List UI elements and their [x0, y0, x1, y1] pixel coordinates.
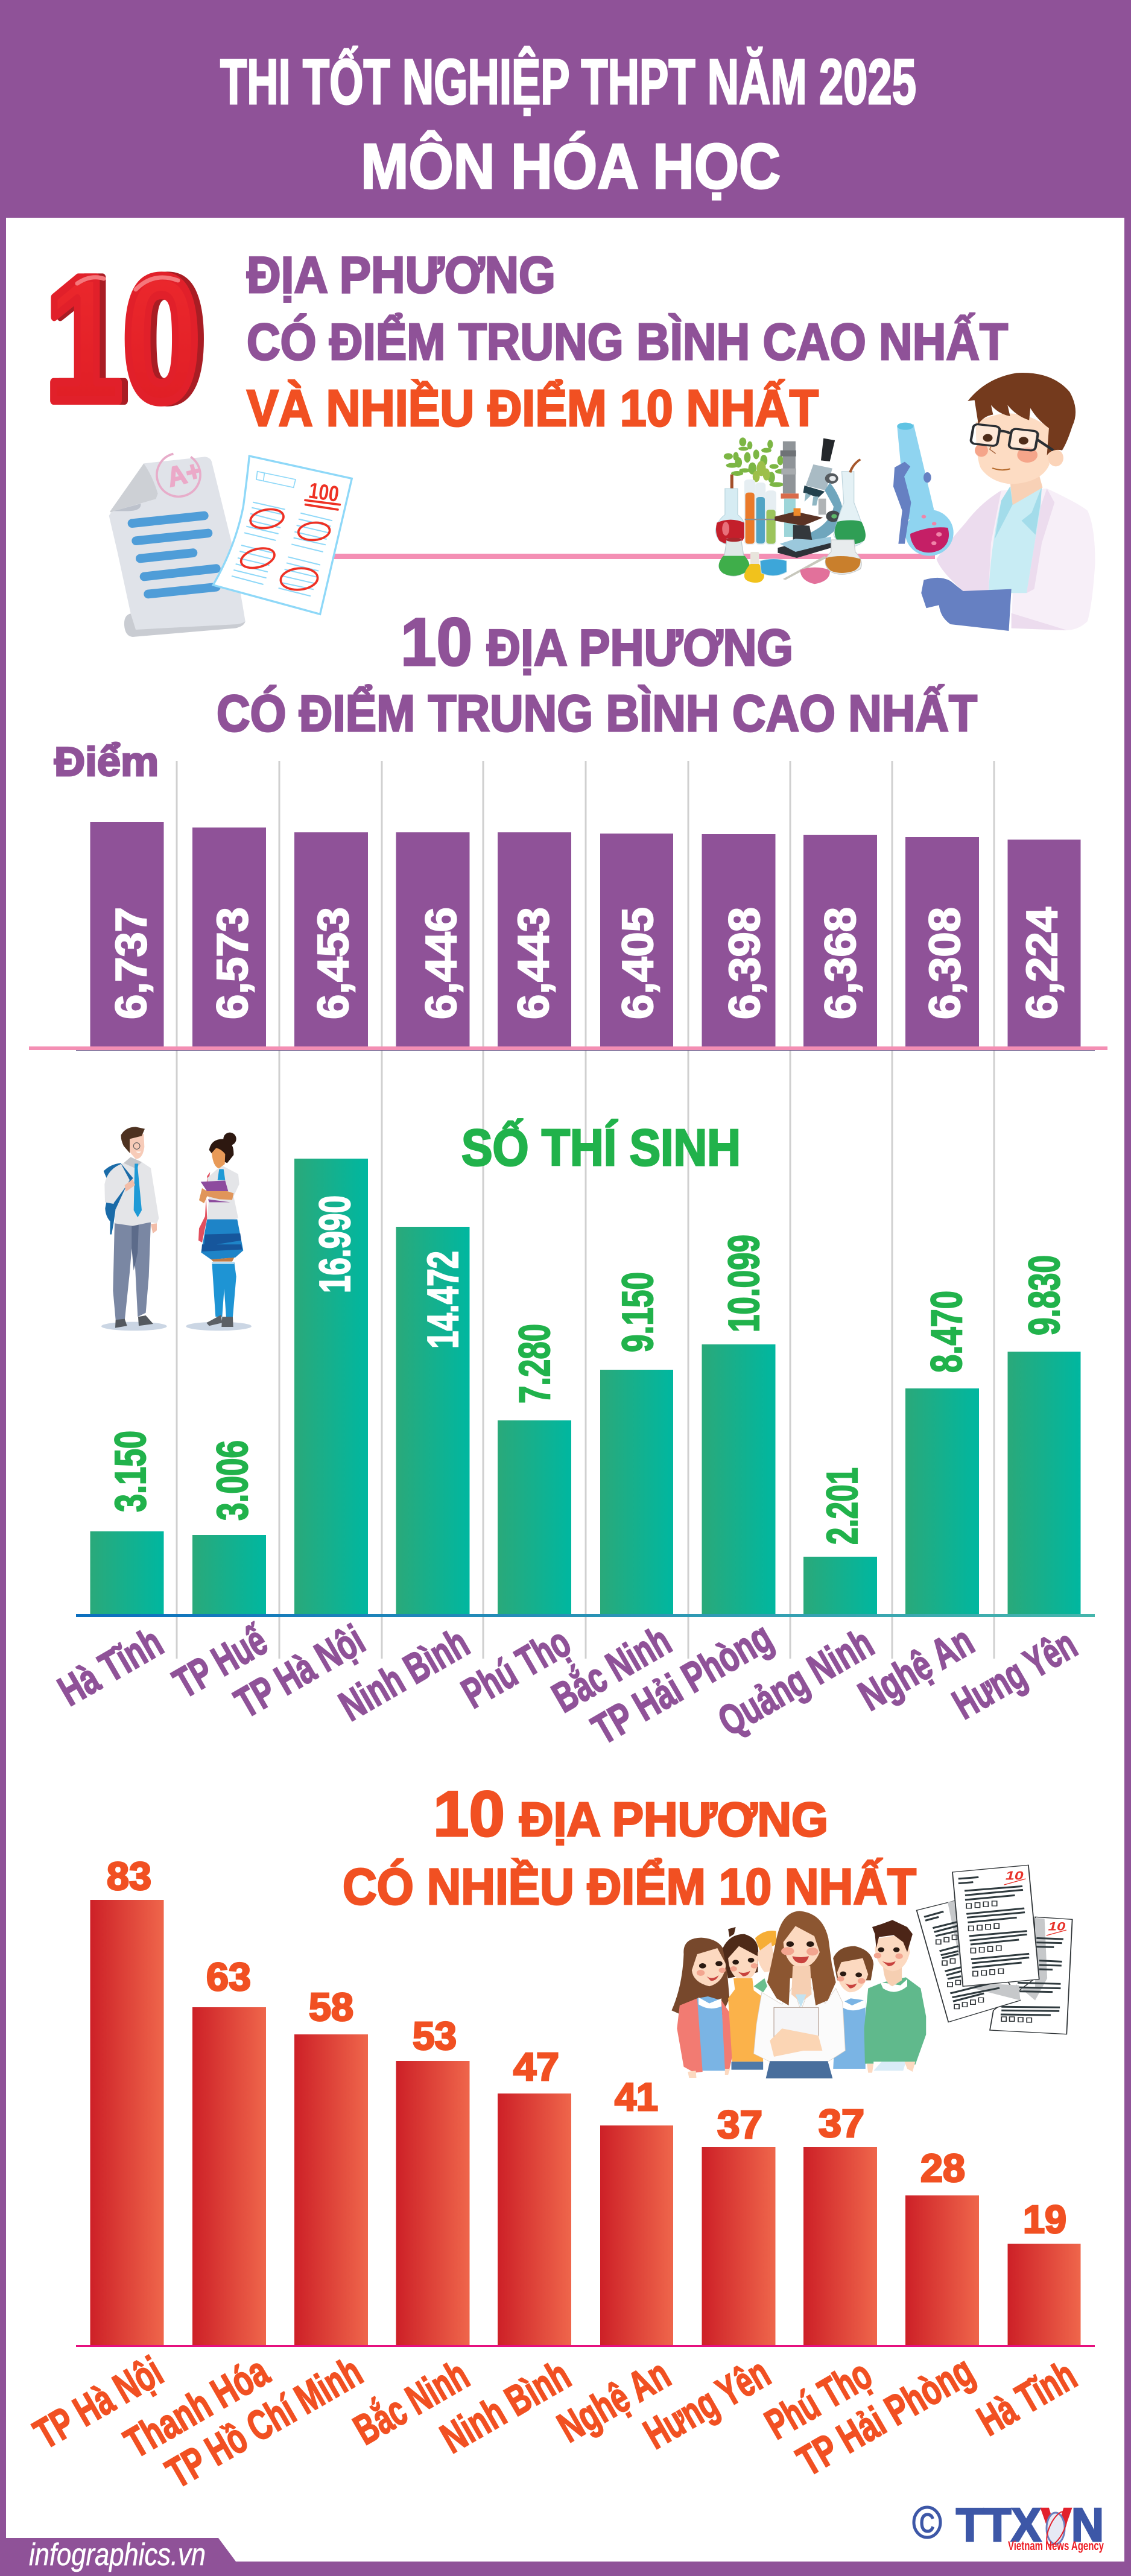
section heading: average score: ĐỊA PHƯƠNG: [487, 619, 793, 677]
subtitle heading: ĐỊA PHƯƠNG: [247, 247, 556, 304]
province labels: orange: Phú Thọ: [758, 2350, 879, 2448]
bar: Phú Thọ 6,443: [498, 832, 571, 1046]
province labels: purple: Nghệ An: [851, 1617, 981, 1720]
logo: TTXVN: TTXVN: [956, 2498, 1104, 2551]
bar chart: number of 10-point scores: [90, 1854, 1081, 2345]
bar: TP Hải Phòng 28: [905, 2146, 979, 2345]
logo: TTXVN: C: [919, 2507, 935, 2539]
blonde student: [754, 1931, 776, 1992]
bar: Ninh Bình 14.472: [396, 1227, 469, 1615]
bar: Hưng Yên 9.830: 9.830: [1021, 1255, 1069, 1335]
heading: number of candidates: SỐ THÍ SINH: [461, 1119, 741, 1177]
bar: TP Hà Nội 16.990: [294, 1159, 368, 1615]
bar: TP Hải Phòng 10.099: [702, 1235, 776, 1615]
bar: Hưng Yên 37: 37: [717, 2103, 762, 2147]
province labels: orange: [27, 2347, 1084, 2497]
bar: Bắc Ninh 53: [396, 2014, 469, 2345]
bar: Nghệ An 8.470: [905, 1291, 979, 1615]
province labels: purple: TP Hà Nội: [227, 1616, 372, 1727]
bar: TP Hải Phòng 6,398: 6,398: [721, 907, 769, 1019]
bar chart: average score: [90, 822, 1081, 1046]
province labels: purple: TP Huế: [165, 1616, 275, 1707]
section heading: average score: 10: [401, 604, 472, 680]
bar: Hưng Yên 6,224: [1007, 840, 1081, 1046]
bar: Phú Thọ 7.280: [498, 1324, 571, 1615]
bar: Nghệ An 8.470: 8.470: [923, 1291, 971, 1373]
bar: Thanh Hóa 63: [192, 1955, 266, 2345]
section heading: most 10-point scores: ĐỊA PHƯƠNG: [519, 1793, 828, 1846]
section heading: average score: CÓ ĐIỂM TRUNG BÌNH CAO NHẤT: [217, 685, 977, 742]
bar: Ninh Bình 6,446: [396, 832, 469, 1046]
province labels: orange: Hà Tĩnh: [970, 2351, 1084, 2445]
bar: TP Hồ Chí Minh 58: 58: [309, 1985, 353, 2029]
bar: TP Hải Phòng 6,398: [702, 834, 776, 1046]
icon: two students: [101, 1127, 252, 1331]
bar: TP Hà Nội 16.990: 16.990: [311, 1195, 360, 1293]
male student: [101, 1127, 167, 1331]
bar: Phú Thọ 7.280: 7.280: [511, 1324, 559, 1404]
boy in green sweater: [864, 1920, 926, 2073]
subtitle heading: CÓ ĐIỂM TRUNG BÌNH CAO NHẤT: [247, 313, 1008, 371]
section heading: most 10-point scores: [343, 1777, 916, 1915]
province labels: orange: TP Hải Phòng: [789, 2347, 981, 2485]
section heading: average score: [217, 604, 977, 742]
bar: Quảng Ninh 2.201: [803, 1467, 877, 1615]
province labels: purple: TP Hải Phòng: [584, 1613, 780, 1753]
province labels: orange: Nghệ An: [550, 2350, 678, 2451]
province labels: orange: Ninh Bình: [433, 2351, 578, 2462]
bar: Bắc Ninh 53: 53: [413, 2014, 457, 2058]
bar chart: number of candidates: [90, 1159, 1081, 1615]
subtitle heading: [247, 247, 1008, 437]
bar: Hà Tĩnh 6,737: [90, 822, 164, 1046]
bar: Nghệ An 41: 41: [615, 2075, 658, 2119]
axis label: Điểm: Điểm: [54, 739, 159, 785]
exam sheets marked 10: 10: [1048, 1920, 1066, 1933]
icon: big red number 10: 10: [45, 239, 200, 438]
province labels: orange: TP Hồ Chí Minh: [158, 2347, 370, 2497]
bar: Ninh Bình 47: [498, 2045, 571, 2345]
icon: scientist holding flask: [893, 373, 1095, 631]
bar: Bắc Ninh 9.150: [600, 1272, 673, 1615]
bar: TP Huế 3.006: 3.006: [209, 1440, 257, 1521]
bar: Bắc Ninh 6,405: 6,405: [614, 907, 662, 1019]
subtitle heading: VÀ NHIỀU ĐIỂM 10 NHẤT: [247, 379, 819, 437]
bar: TP Huế 6,573: [192, 828, 266, 1046]
bar: Nghệ An 6,308: 6,308: [921, 907, 969, 1019]
bar: Bắc Ninh 9.150: 9.150: [614, 1272, 662, 1352]
girl in pink cardigan: [671, 1938, 734, 2078]
icon: laboratory equipment: [715, 437, 866, 584]
bar: TP Hà Nội 83: [90, 1854, 164, 2345]
bar: Ninh Bình 6,446: 6,446: [417, 907, 466, 1019]
bar: Quảng Ninh 6,368: 6,368: [817, 907, 865, 1019]
province labels: orange: TP Hà Nội: [27, 2347, 171, 2458]
province labels: orange: Bắc Ninh: [346, 2351, 477, 2454]
bar: Nghệ An 6,308: [905, 837, 979, 1046]
bar: Hà Tĩnh 6,737: 6,737: [107, 907, 156, 1019]
bar: Hưng Yên 9.830: [1007, 1255, 1081, 1615]
province labels: orange: Hưng Yên: [636, 2349, 778, 2458]
bar: Quảng Ninh 6,368: [803, 835, 877, 1046]
section heading: most 10-point scores: CÓ NHIỀU ĐIỂM 10 NHẤT: [343, 1858, 916, 1915]
title: [220, 46, 916, 202]
bar: TP Hồ Chí Minh 58: [294, 1985, 368, 2345]
bar: Ninh Bình 47: 47: [513, 2045, 559, 2089]
bar: Nghệ An 41: [600, 2075, 673, 2345]
bar: Hà Tĩnh 3.150: [90, 1431, 164, 1615]
title: MÔN HÓA HỌC: [361, 131, 781, 202]
bar: TP Hải Phòng 28: 28: [920, 2146, 965, 2190]
bar: Quảng Ninh 2.201: 2.201: [819, 1467, 867, 1545]
exam sheets marked 10: 10: [1006, 1870, 1024, 1883]
bar: Thanh Hóa 63: 63: [206, 1955, 251, 1999]
bar: TP Huế 3.006: [192, 1440, 266, 1615]
bar: TP Hà Nội 6,453: [294, 832, 368, 1046]
bar: TP Hà Nội 6,453: 6,453: [309, 907, 358, 1019]
bar: Hà Tĩnh 19: [1007, 2197, 1081, 2345]
icon: big red number 10: 10: [51, 239, 206, 438]
bar: Hà Tĩnh 19: 19: [1023, 2197, 1066, 2241]
bar: Phú Thọ 37: 37: [819, 2101, 864, 2145]
icon: teacher with students: [671, 1865, 1072, 2078]
bar: TP Huế 6,573: 6,573: [209, 907, 257, 1019]
exam sheets marked 10: [917, 1865, 1072, 2034]
province labels: purple: Phú Thọ: [454, 1618, 578, 1717]
section heading: most 10-point scores: 10: [433, 1777, 505, 1850]
icon: exam papers: [109, 447, 352, 637]
bar: Hưng Yên 37: [702, 2103, 776, 2345]
female student: [186, 1133, 252, 1331]
bar: TP Hà Nội 83: 83: [107, 1854, 151, 1898]
bar: Hà Tĩnh 3.150: 3.150: [107, 1431, 155, 1512]
province labels: purple: [51, 1613, 1085, 1753]
pink rule: [326, 554, 935, 559]
bar: Bắc Ninh 6,405: [600, 834, 673, 1046]
boy in blue shirt: [833, 1946, 873, 2069]
girl in yellow shirt: [723, 1927, 763, 2070]
footer tab with website: infographics.vn: [29, 2537, 206, 2572]
teacher: [754, 1911, 845, 2078]
province labels: purple: Quảng Ninh: [711, 1619, 881, 1745]
bar: Hưng Yên 6,224: 6,224: [1018, 907, 1066, 1019]
province labels: orange: Thanh Hóa: [117, 2347, 277, 2467]
bar: Phú Thọ 37: [803, 2101, 877, 2345]
bar: TP Hải Phòng 10.099: 10.099: [720, 1235, 768, 1332]
province labels: purple: Bắc Ninh: [544, 1616, 679, 1721]
bar: Phú Thọ 6,443: 6,443: [510, 907, 558, 1019]
icon: exam papers: A+: [164, 455, 204, 493]
province labels: purple: Ninh Bình: [332, 1619, 477, 1730]
bar: Ninh Bình 14.472: 14.472: [419, 1251, 467, 1349]
province labels: purple: Hà Tĩnh: [51, 1618, 171, 1715]
icon: exam papers: 100: [307, 478, 341, 507]
